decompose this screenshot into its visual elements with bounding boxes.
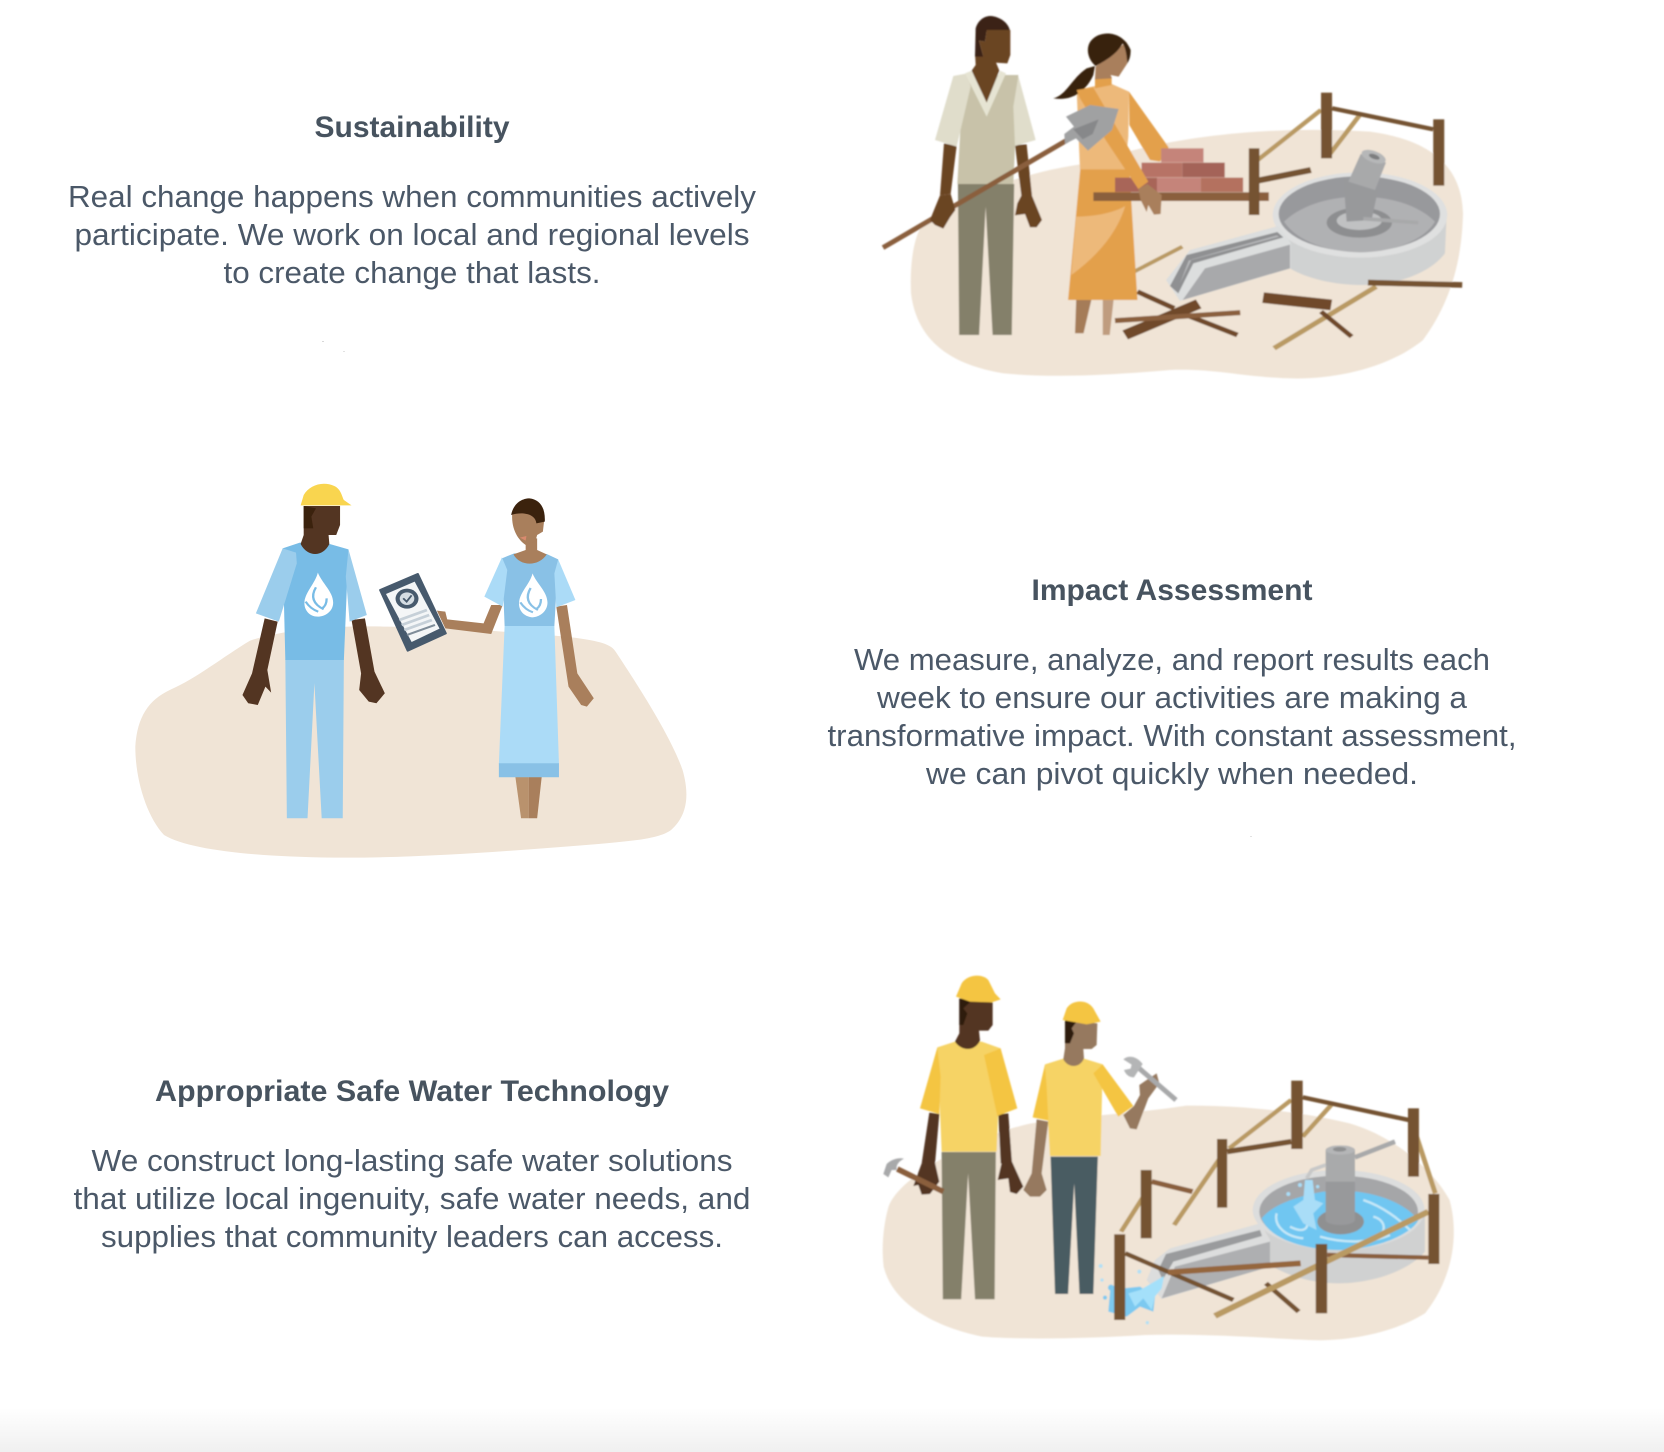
heading: Sustainability: Sustainability <box>314 111 510 144</box>
worker with wrench <box>1023 1001 1176 1294</box>
text block: sustainability description <box>68 180 757 290</box>
text block: sustainability description: participate. We work on local and regional levels <box>74 218 749 252</box>
text block: technology description <box>74 1144 750 1254</box>
ground blob <box>135 626 686 858</box>
tablet <box>380 574 446 651</box>
bricks <box>1115 148 1243 192</box>
text block: impact assessment description: We measure, analyze, and report results each <box>854 643 1490 677</box>
woman legs and skirt <box>1068 168 1137 335</box>
water tank, pump and channel <box>1099 1142 1425 1324</box>
text block: sustainability description: Real change happens when communities actively <box>68 180 757 214</box>
drop logo <box>304 573 333 617</box>
man in blue shirt <box>242 484 385 818</box>
text block: impact assessment description: we can pivot quickly when needed. <box>925 757 1418 791</box>
ground blob <box>883 1106 1454 1340</box>
text block: sustainability description: to create change that lasts. <box>224 256 600 290</box>
plank board and post <box>1093 148 1269 215</box>
worker with hammer <box>883 976 1023 1299</box>
fence <box>1114 1081 1439 1320</box>
ground blob <box>911 130 1463 378</box>
illustration: workers with hard hats at water pump <box>883 976 1454 1340</box>
panel: appropriate safe water technology text <box>74 1075 750 1254</box>
man standing <box>935 16 1042 335</box>
panel: sustainability text <box>68 111 757 290</box>
water tank and channel <box>1166 147 1447 301</box>
bottom page shadow <box>0 1408 1664 1452</box>
illustration: builders with shovel, bricks and water tank <box>883 16 1463 378</box>
heading: Appropriate Safe Water Technology: Appropriate Safe Water Technology <box>155 1075 670 1108</box>
woman upper body and head <box>1053 34 1169 169</box>
hard hat <box>301 484 352 505</box>
illustration: two people with tablet <box>135 484 686 858</box>
panel: impact assessment text <box>828 574 1516 791</box>
text block: technology description: that utilize local ingenuity, safe water needs, and <box>74 1182 750 1216</box>
scattered planks <box>1115 247 1462 348</box>
drop logo <box>519 573 547 617</box>
text block: impact assessment description: week to ensure our activities are making a <box>876 681 1467 715</box>
text block: impact assessment description <box>828 643 1516 791</box>
heading: Impact Assessment: Impact Assessment <box>1032 574 1313 607</box>
text block: technology description: supplies that community leaders can access. <box>101 1220 723 1254</box>
text block: impact assessment description: transformative impact. With constant assessment, <box>828 719 1516 753</box>
water splash <box>1099 1264 1164 1324</box>
fence <box>1258 93 1444 186</box>
hammer <box>883 1158 943 1195</box>
woman's arm, shovel and man's hand <box>883 87 1162 248</box>
text block: technology description: We construct long-lasting safe water solutions <box>92 1144 732 1178</box>
wrench <box>1123 1057 1176 1100</box>
woman in blue dress <box>437 498 594 818</box>
